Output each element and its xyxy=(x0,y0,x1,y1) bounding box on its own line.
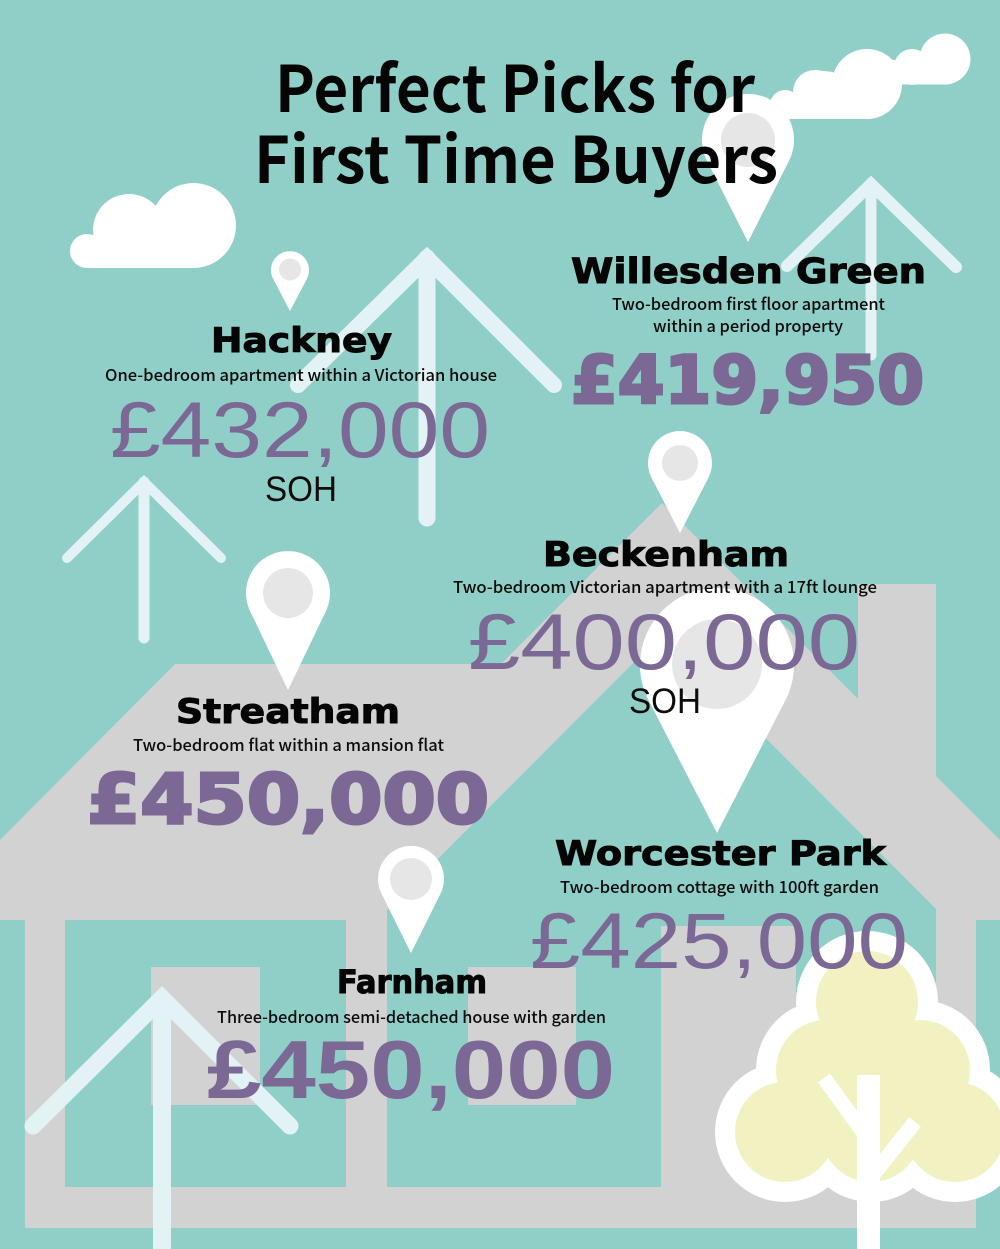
note: SOH Beckenham: SOH xyxy=(629,682,701,721)
heading: Worcester Park: Worcester Park xyxy=(555,834,888,874)
description: Hackney: One-bedroom apartment within a Victorian house xyxy=(105,362,497,386)
panel: Worcester Park xyxy=(530,588,908,985)
pin: Hackney xyxy=(271,251,309,311)
arrow: bottom left xyxy=(33,998,290,1249)
price: Streatham: £450,000 xyxy=(87,760,489,840)
panel: Streatham xyxy=(87,551,489,840)
description: Beckenham: Two-bedroom Victorian apartment with a 17ft lounge xyxy=(453,574,877,598)
heading: Willesden Green: Willesden Green xyxy=(571,252,926,292)
title: First Time Buyers xyxy=(254,110,778,202)
cloud: top right xyxy=(770,34,970,120)
panel: Farnham xyxy=(207,846,615,1116)
pin: Worcester Park xyxy=(640,588,794,833)
price: Willesden Green: £419,950 xyxy=(571,342,924,419)
price: Beckenham: £400,000 xyxy=(468,597,860,686)
arrow: large centre xyxy=(298,258,554,518)
pin: Beckenham xyxy=(648,431,712,533)
pin: Willesden Green xyxy=(702,94,794,242)
cloud: left xyxy=(70,183,236,268)
panel: Hackney xyxy=(105,251,497,509)
note: SOH Hackney: SOH xyxy=(265,470,337,509)
title xyxy=(254,39,778,202)
panel: Beckenham xyxy=(453,431,877,721)
description: Willesden Green line 1: Two-bedroom first floor apartment xyxy=(612,291,885,315)
heading: Farnham: Farnham xyxy=(337,963,487,1001)
description: Willesden Green line 2: within a period property xyxy=(653,313,843,337)
pin: Farnham xyxy=(378,846,444,953)
arrow: left xyxy=(67,482,221,638)
description: Streatham: Two-bedroom flat within a mansion flat xyxy=(133,732,444,756)
description: Farnham: Three-bedroom semi-detached house with garden xyxy=(217,1004,606,1028)
price: Worcester Park: £425,000 xyxy=(530,896,908,985)
arrow: top right xyxy=(787,184,956,355)
description: Worcester Park: Two-bedroom cottage with 100ft garden xyxy=(560,874,879,898)
heading: Beckenham: Beckenham xyxy=(543,535,789,575)
price: Hackney: £432,000 xyxy=(110,385,490,474)
heading: Streatham: Streatham xyxy=(176,692,400,732)
tree xyxy=(715,931,1000,1249)
price: Farnham: £450,000 xyxy=(207,1023,615,1116)
heading: Hackney: Hackney xyxy=(211,321,392,361)
title: Perfect Picks for xyxy=(275,39,755,131)
panel: Willesden Green xyxy=(571,94,926,419)
house illustration xyxy=(0,503,1000,1228)
pin: Streatham xyxy=(246,551,330,690)
